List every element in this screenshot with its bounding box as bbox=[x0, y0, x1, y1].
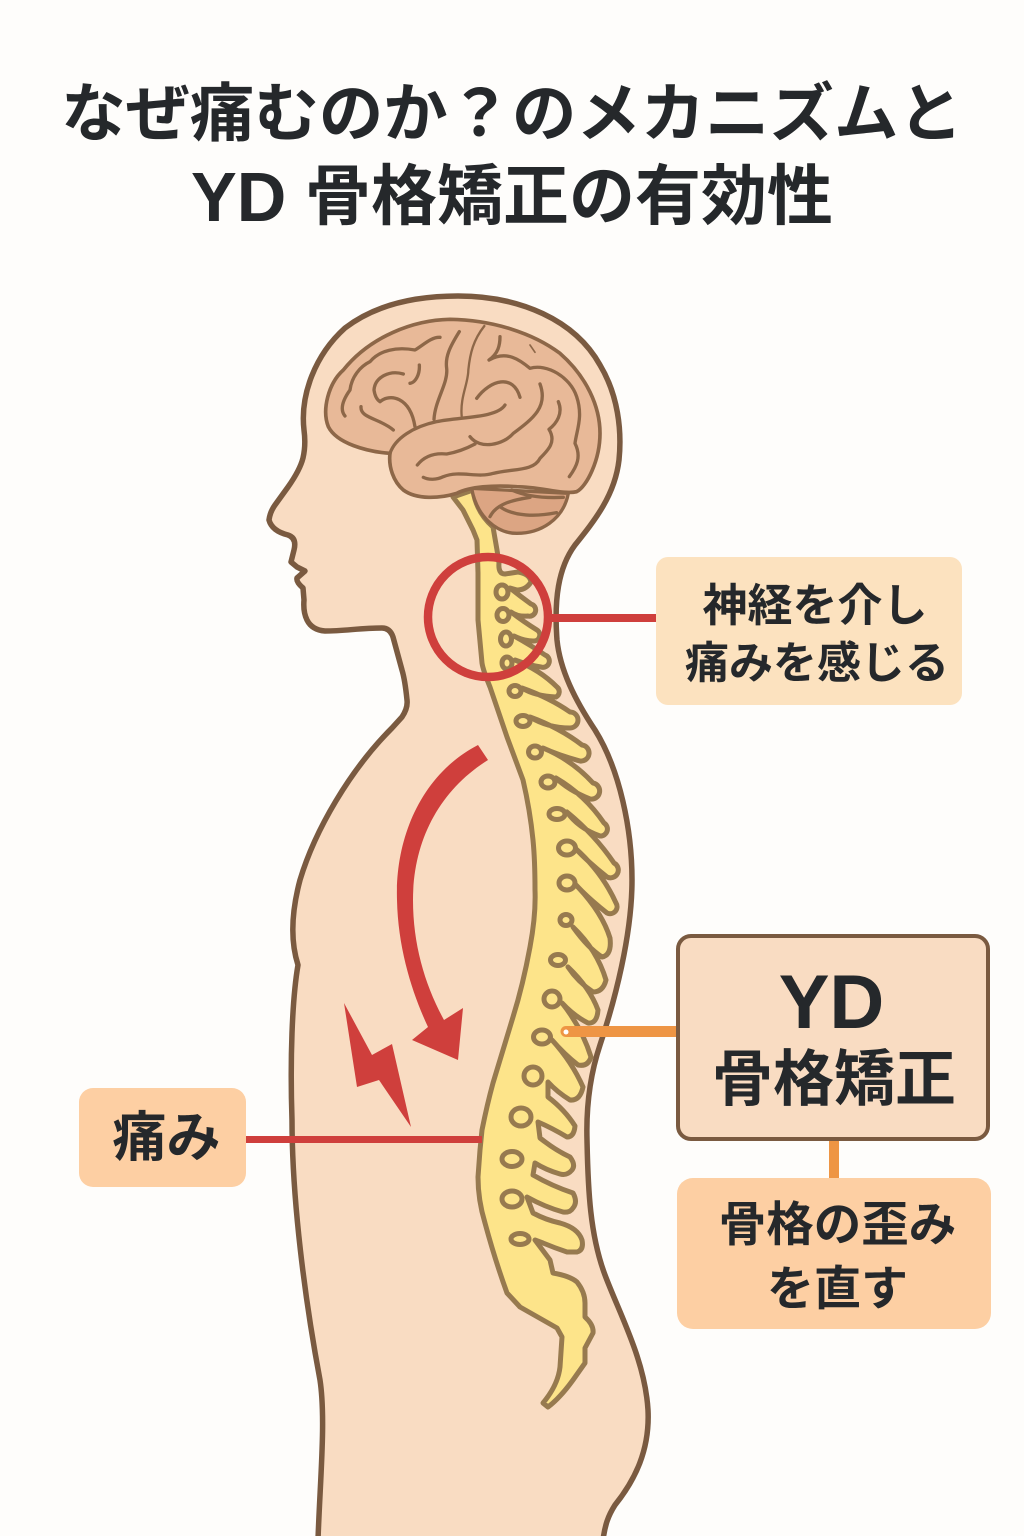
connector: YD box to result box bbox=[829, 1139, 839, 1180]
brain folds bbox=[342, 326, 580, 517]
cerebrum bbox=[326, 319, 600, 497]
title line 2: YD: YD bbox=[191, 158, 286, 236]
title line 1: なぜ痛むのか？のメカニズムと bbox=[61, 78, 963, 150]
cerebellum bbox=[472, 488, 568, 533]
title line 2: Japanese: 骨格矯正の有効性 bbox=[305, 159, 833, 233]
body silhouette bbox=[269, 296, 648, 1536]
vertebra loops bbox=[496, 585, 576, 1244]
label: nerve pain perception bbox=[656, 557, 962, 705]
label: pain bbox=[79, 1088, 246, 1187]
box: fix skeletal distortion bbox=[677, 1178, 991, 1329]
label text line 1: 神経を介し bbox=[702, 580, 928, 631]
brain bbox=[326, 319, 600, 533]
YD text: YD bbox=[779, 960, 884, 1045]
label text line 2: 痛みを感じる bbox=[685, 639, 949, 688]
connector: spine to YD box bbox=[560, 1026, 676, 1037]
connector: circle to nerve label bbox=[548, 614, 657, 622]
title bbox=[61, 78, 963, 236]
result text line 2: を直す bbox=[767, 1262, 908, 1315]
box: YD skeletal correction bbox=[676, 934, 990, 1141]
lightning bolt icon bbox=[344, 1003, 411, 1127]
connector: pain label to spine bbox=[245, 1136, 482, 1143]
curved red arrow bbox=[397, 745, 488, 1060]
red circle around neck bbox=[428, 557, 548, 677]
result text line 1: 骨格の歪み bbox=[719, 1199, 956, 1252]
skeletal correction text: 骨格矯正 bbox=[712, 1045, 956, 1113]
spine and spinal cord bbox=[453, 490, 618, 1407]
pain text: 痛み bbox=[112, 1108, 220, 1168]
